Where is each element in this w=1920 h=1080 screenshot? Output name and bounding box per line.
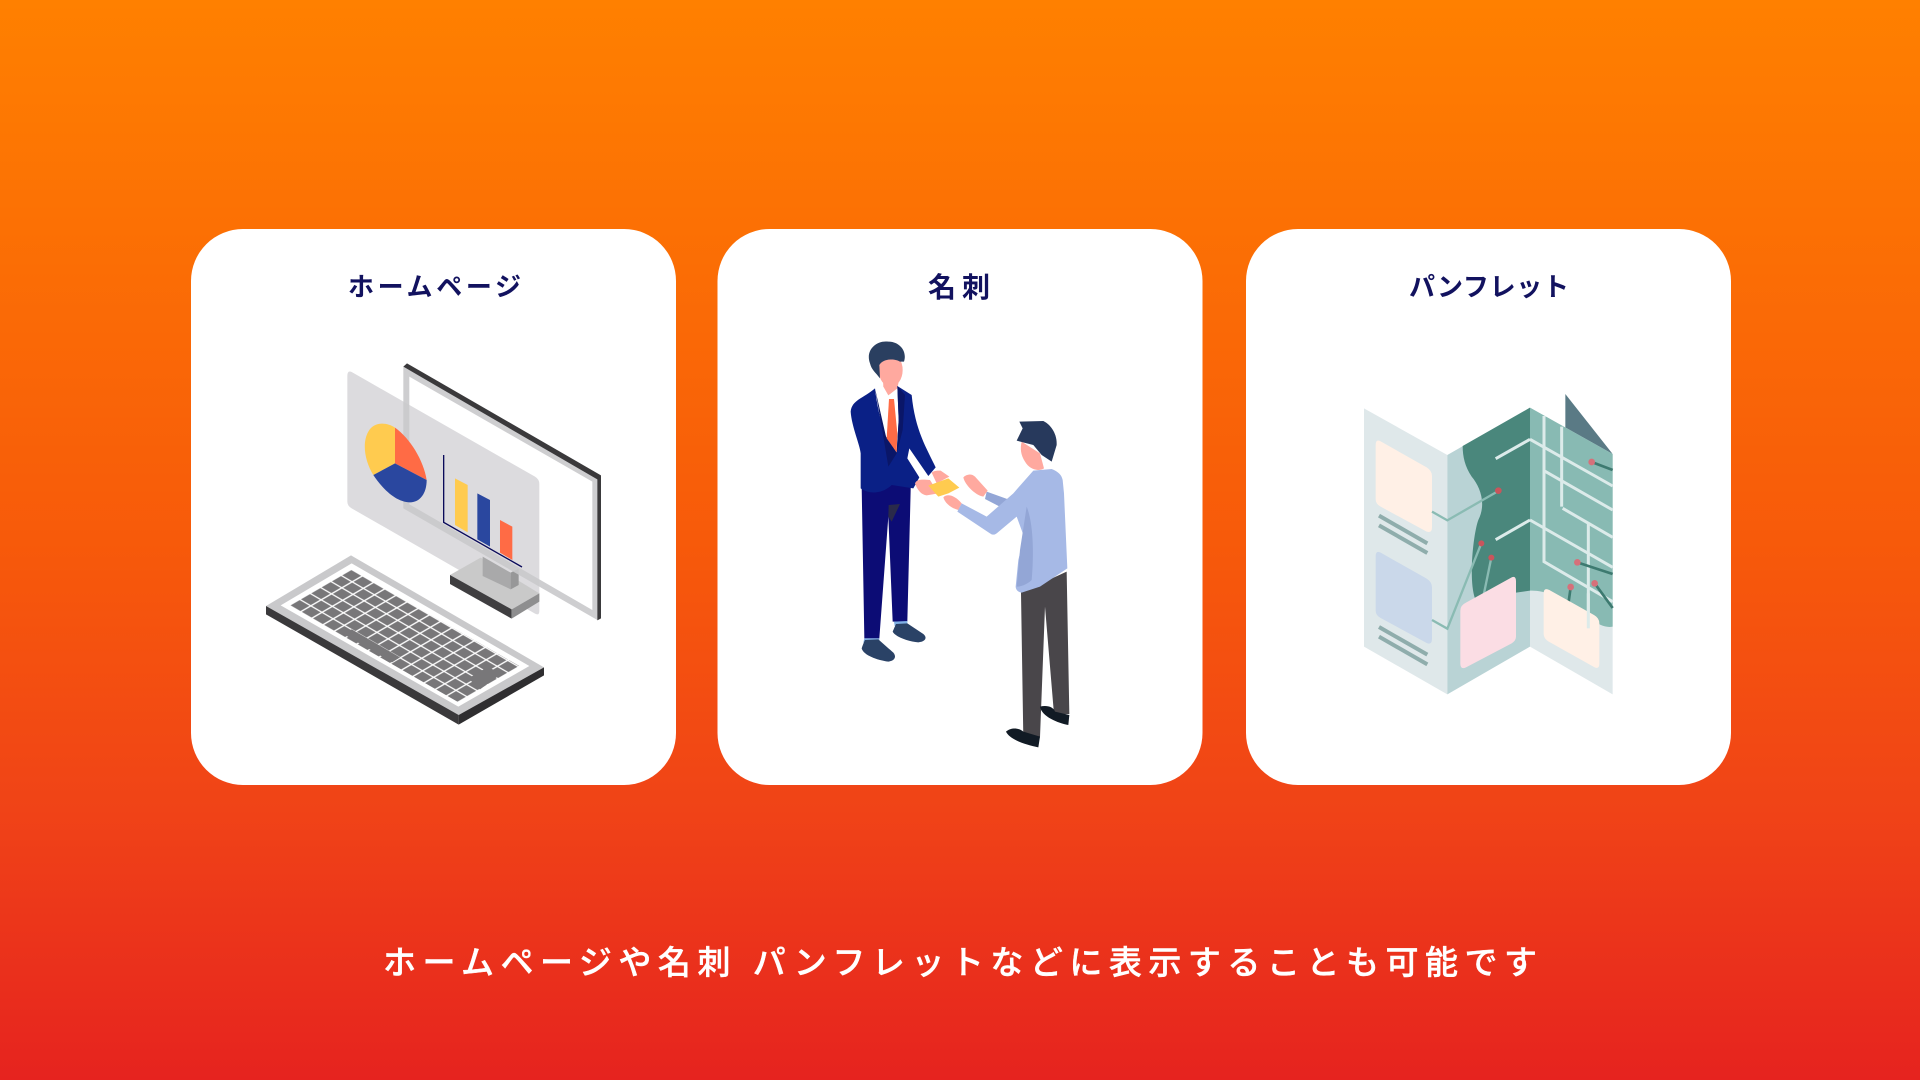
left fold	[1364, 408, 1447, 694]
right fold with street map	[1530, 408, 1613, 694]
business card	[928, 478, 959, 497]
heading: business card: 名刺	[928, 272, 990, 303]
icon: two men exchanging business card	[851, 341, 1069, 747]
icon: folded pamphlet	[1364, 394, 1613, 694]
keyboard	[266, 555, 544, 725]
fold triangle	[1565, 394, 1613, 454]
panel: pamphlet card	[1246, 229, 1731, 785]
man in blue shirt	[943, 421, 1069, 747]
panel: business card	[718, 229, 1202, 785]
monitor stand	[450, 557, 539, 619]
icon: desktop computer with charts	[266, 363, 601, 725]
middle fold with water	[1432, 408, 1530, 694]
translucent screen panel	[347, 371, 539, 614]
pie chart	[365, 424, 427, 502]
heading: homepage: ホームページ	[348, 272, 521, 302]
monitor frame	[403, 363, 601, 620]
panel: homepage card	[191, 229, 676, 785]
caption: ホームページや名刺 パンフレットなどに表示することも可能です	[383, 944, 1537, 981]
man in navy suit	[851, 341, 949, 662]
heading: pamphlet: パンフレット	[1409, 272, 1569, 302]
bar chart	[444, 455, 522, 567]
